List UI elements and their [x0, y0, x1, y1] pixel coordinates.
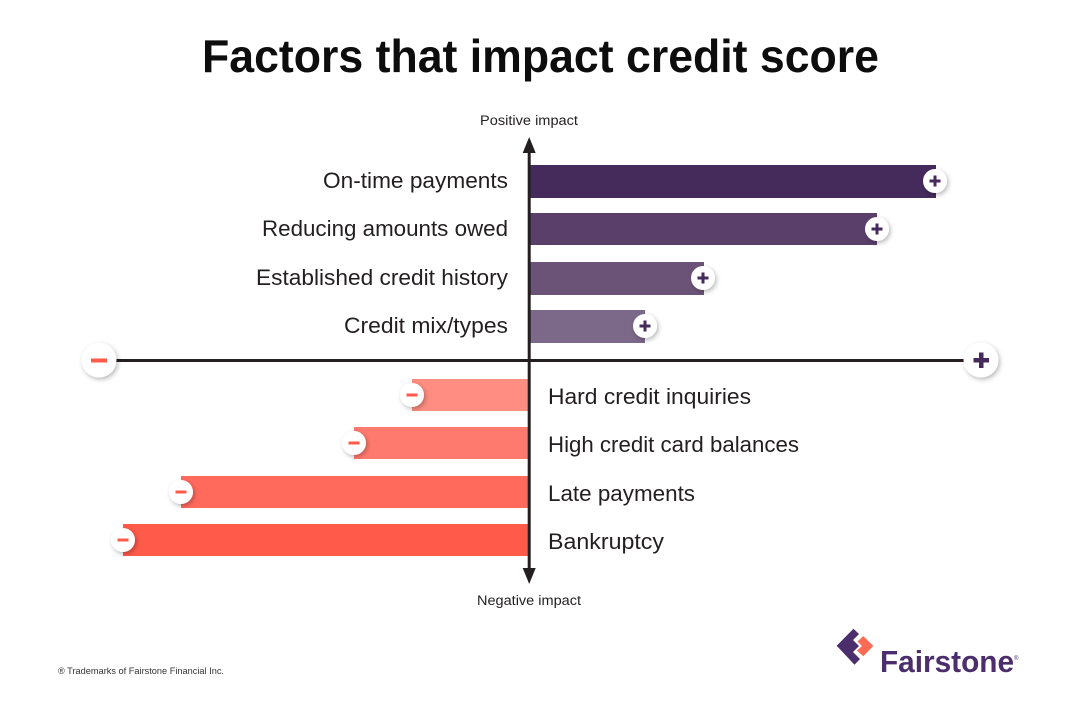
- positive factor labels: [256, 168, 508, 338]
- positive impact axis label: Positive impact: [480, 113, 578, 128]
- icon: plus credit mix: [633, 314, 657, 338]
- logo registered mark: ®: [1014, 655, 1019, 662]
- label: high credit card balances: High credit card balances: [548, 432, 799, 457]
- label: established credit history: Established credit history: [256, 265, 508, 290]
- icon: minus hard credit inquiries: [400, 383, 424, 407]
- logo mark purple diamond: [837, 629, 860, 665]
- vertical axis with arrows: [523, 137, 536, 584]
- logo wordmark: Fairstone: [880, 644, 1014, 679]
- negative impact axis label: Negative impact: [477, 593, 581, 608]
- icon: plus established credit history: [691, 266, 715, 290]
- negative factor labels: [548, 384, 799, 554]
- bar: on-time payments: [529, 165, 936, 198]
- bar: reducing amounts owed: [529, 213, 877, 245]
- label: credit mix/types: Credit mix/types: [344, 313, 508, 338]
- bar: credit mix/types: [529, 310, 645, 343]
- icon: axis minus: [82, 342, 116, 378]
- icon: plus on-time payments: [923, 169, 947, 193]
- label: late payments: Late payments: [548, 481, 695, 506]
- icon: minus late payments: [169, 480, 193, 504]
- bar: established credit history: [529, 262, 704, 295]
- title: Factors that impact credit score: [202, 30, 879, 82]
- label: on-time payments: On-time payments: [323, 168, 508, 193]
- logo mark orange diamond: [857, 636, 873, 656]
- icon: minus high credit card balances: [342, 431, 366, 455]
- footnote: ® Trademarks of Fairstone Financial Inc.: [58, 666, 224, 677]
- label: bankruptcy: Bankruptcy: [548, 529, 664, 554]
- horizontal axis: [100, 359, 980, 362]
- negative bars: [123, 379, 528, 556]
- bar: hard credit inquiries: [412, 379, 528, 411]
- icon: plus reducing amounts owed: [865, 217, 889, 241]
- label: hard credit inquiries: Hard credit inquiries: [548, 384, 751, 409]
- positive bars: [529, 165, 936, 343]
- bar: high credit card balances: [354, 427, 528, 459]
- bar: bankruptcy: [123, 524, 528, 556]
- label: reducing amounts owed: Reducing amounts owed: [262, 216, 508, 241]
- icon: axis plus: [964, 342, 998, 378]
- logo: Fairstone: [837, 629, 1019, 679]
- bar: late payments: [181, 476, 528, 508]
- icon: minus bankruptcy: [111, 528, 135, 552]
